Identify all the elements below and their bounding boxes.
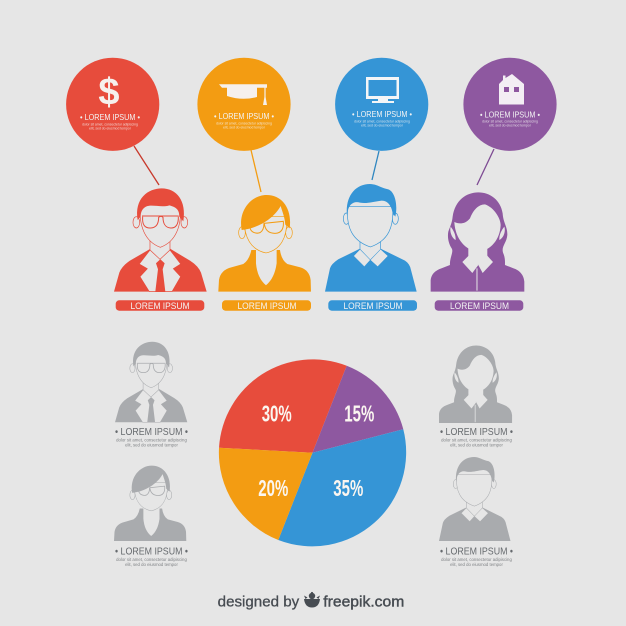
slice: orange 20% [219,448,312,540]
label: blue: LOREM IPSUM [344,301,402,311]
footer credit: freepik.com [323,594,404,610]
bubble heading: • LOREM IPSUM • [480,110,540,120]
value: 20%: 20% [258,475,288,501]
caption: top left: elit, sed do eiusmod tempor [125,442,178,447]
caption: bottom left: dolor sit amet, consectetur adipiscing [116,557,187,562]
label: purple: LOREM IPSUM [450,301,509,311]
icon: house [499,74,524,104]
caption: top right: • LOREM IPSUM • [440,426,513,438]
label: blue [328,300,417,311]
icon: graduation cap [219,84,267,105]
connector: blue bubble to person [372,151,379,180]
caption: bottom left: elit, sed do eiusmod tempor [125,562,178,567]
gray person: curly woman [439,346,512,423]
connector: red bubble to person [134,146,159,185]
person: red man with glasses [114,188,207,292]
caption: bottom right: elit, sed do eiusmod tempor [450,562,503,567]
caption: bottom right: • LOREM IPSUM • [440,545,513,557]
bubble text: dolor sit amet, consectetur adipiscing [82,122,138,126]
icon: monitor [366,77,399,103]
connector: purple bubble to person [477,149,494,185]
bubble text: dolor sit amet, consectetur adipiscing [216,122,272,126]
label: red [116,300,204,311]
gray person: man [439,457,510,541]
bubble heading: • LOREM IPSUM • [352,109,412,119]
value: 15%: 15% [344,400,374,426]
icon: dollar sign: $ [98,72,120,114]
bubble text: elit, sed do eiusmod tempor [223,125,266,129]
pie chart [219,359,406,546]
bubble text: elit, sed do eiusmod tempor [489,123,532,127]
bubble text: dolor sit amet, consectetur adipiscing [482,120,538,124]
footer credit [218,592,404,610]
person: orange woman with glasses [218,195,311,292]
bubble text: elit, sed do eiusmod tempor [89,126,132,130]
bubble text: dolor sit amet, consectetur adipiscing [354,120,410,124]
label: red: LOREM IPSUM [130,301,190,311]
label: purple [435,300,523,311]
bubble: red money [66,58,159,151]
gray person: woman with glasses [114,466,186,541]
bubble: orange education [197,58,291,151]
bubble heading: • LOREM IPSUM • [80,112,140,122]
person: purple woman [431,192,524,292]
gray person: man with glasses [115,342,187,422]
value: 30%: 30% [262,400,292,426]
caption: top right: elit, sed do eiusmod tempor [450,442,503,447]
caption: bottom left: • LOREM IPSUM • [115,545,188,557]
slice: blue 35% [278,429,406,546]
caption: top left: • LOREM IPSUM • [115,426,188,438]
bubble text: elit, sed do eiusmod tempor [361,123,404,127]
caption: top left: dolor sit amet, consectetur adipiscing [116,438,187,442]
label: orange: LOREM IPSUM [238,301,296,311]
label: orange [222,300,311,311]
footer credit: designed by [218,594,300,610]
slice: purple 15% [312,366,403,453]
bubble: purple housing [463,58,557,151]
caption: top right [440,426,513,447]
caption: top left [115,426,188,447]
caption: bottom right [440,545,513,567]
caption: bottom right: dolor sit amet, consectetur adipiscing [441,557,512,562]
value: 35%: 35% [333,475,363,501]
caption: top right: dolor sit amet, consectetur adipiscing [441,438,512,442]
bubble: blue technology [335,58,428,151]
connector: orange bubble to person [251,150,261,192]
caption: bottom left [115,545,188,567]
bubble heading: • LOREM IPSUM • [214,111,274,121]
person: blue man [325,184,417,292]
slice: red 30% [219,359,347,453]
icon: freepik logo [304,592,320,608]
